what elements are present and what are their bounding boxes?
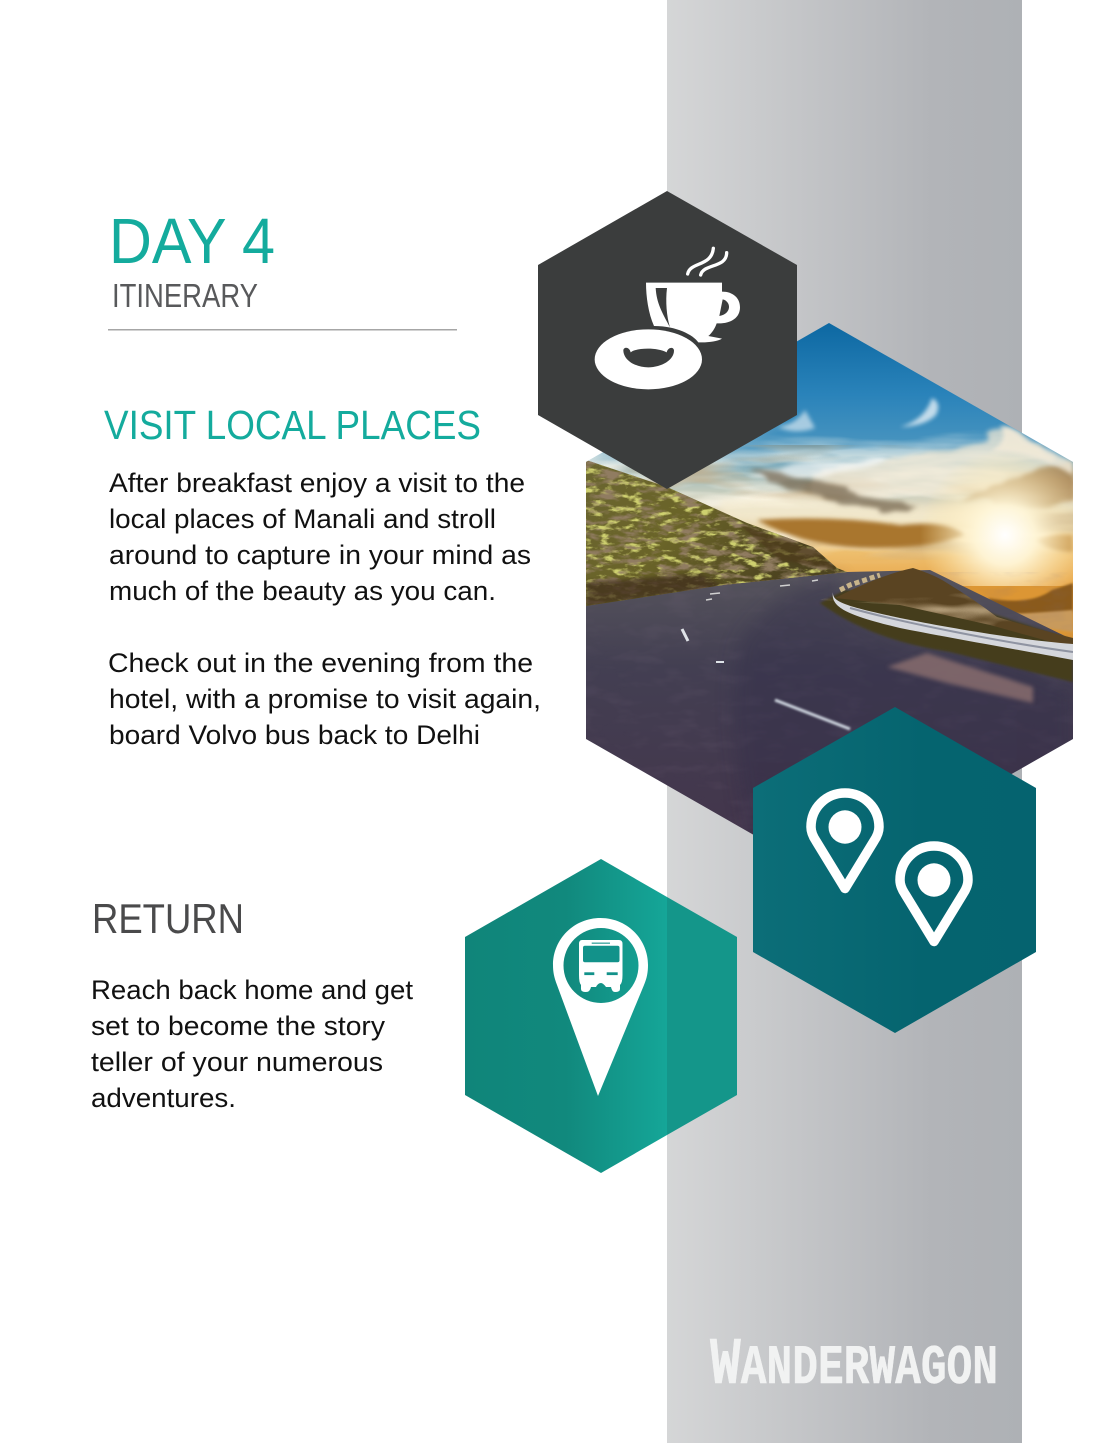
icon: map pin right <box>900 846 968 942</box>
road texture <box>935 572 1062 608</box>
road markings <box>682 580 850 729</box>
title: day 4: DAY 4 <box>109 205 275 277</box>
roadside grass <box>820 590 1073 682</box>
dark hexagon with coffee and donut icon <box>538 191 797 489</box>
green hillside <box>586 458 848 608</box>
road reflection <box>887 653 1033 703</box>
logo: wanderwagon: WANDERWAGON <box>710 1328 998 1404</box>
road shadow <box>744 579 1072 834</box>
text block: return paragraph: teller of your numerous <box>91 1047 383 1077</box>
grey vertical band <box>667 0 1022 1443</box>
text block: return paragraph: set to become the story <box>91 1011 386 1041</box>
text block: visit local places paragraph two: Check out in the evening from the <box>108 648 533 678</box>
icon: bus location pin <box>553 918 648 1096</box>
clouds <box>586 398 1073 565</box>
text block: return paragraph <box>91 975 413 1113</box>
icon: bus <box>579 940 622 992</box>
text block: visit local places paragraph one <box>109 468 531 606</box>
text block: visit local places paragraph one: local places of Manali and stroll <box>109 504 496 534</box>
subtitle: itinerary: ITINERARY <box>112 277 258 314</box>
text block: visit local places paragraph one: much of the beauty as you can. <box>109 576 496 606</box>
text block: return paragraph: Reach back home and get <box>91 975 413 1005</box>
icon: coffee cup and donut <box>595 248 740 389</box>
heading divider <box>108 329 457 330</box>
photo hexagon: sunset road <box>586 323 1073 834</box>
teal hexagon with map pins <box>753 707 1036 1033</box>
heading: return: RETURN <box>92 895 244 942</box>
text block: visit local places paragraph one: After breakfast enjoy a visit to the <box>109 468 525 498</box>
heading: visit local places: VISIT LOCAL PLACES <box>104 402 481 448</box>
far hill <box>820 568 1073 644</box>
text block: return paragraph: adventures. <box>91 1083 236 1113</box>
guardrail <box>833 592 1073 660</box>
sky <box>586 323 1073 603</box>
text block: visit local places paragraph two: hotel, with a promise to visit again, <box>109 684 541 714</box>
text block: visit local places paragraph two: board Volvo bus back to Delhi <box>109 720 480 750</box>
text block: visit local places paragraph one: around to capture in your mind as <box>109 540 531 570</box>
icon: map pin left <box>811 793 879 888</box>
road <box>586 570 1073 834</box>
distant tree line <box>963 582 1073 638</box>
sun glow <box>924 462 1073 586</box>
text block: visit local places paragraph two <box>108 648 541 750</box>
green hexagon with bus pin <box>465 859 737 1173</box>
